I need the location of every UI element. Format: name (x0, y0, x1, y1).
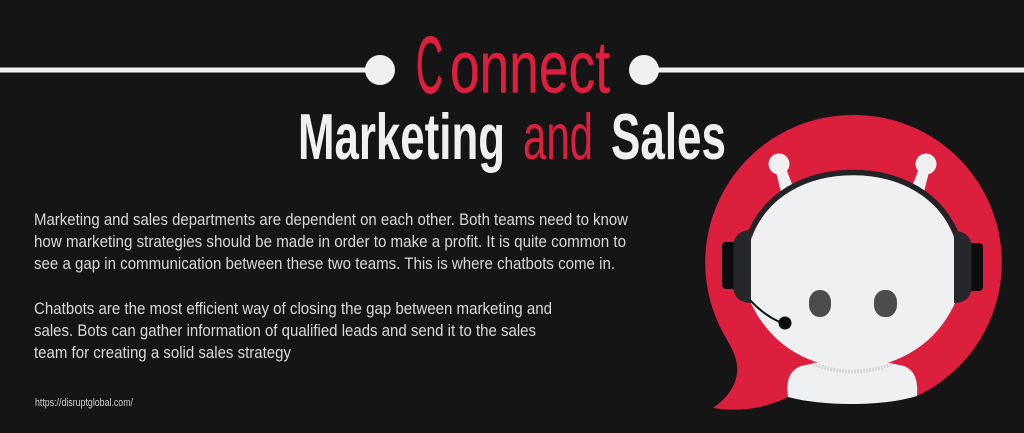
illustration: chatbot in speech bubble (705, 115, 1002, 410)
speech bubble (705, 115, 1002, 410)
paragraph: chatbots close the gap: team for creating a solid sales strategy (34, 343, 291, 362)
robot head (751, 175, 955, 368)
microphone (750, 300, 792, 330)
antennae (768, 154, 936, 192)
title rule: left line and dot (0, 55, 395, 85)
source URL: https://disruptglobal.com/ (35, 397, 134, 409)
heading: Marketing and Sales: and (523, 100, 593, 173)
paragraph: marketing and sales dependence: Marketing and sales departments are dependent on each other. Both teams need to know (34, 210, 629, 229)
left eye (809, 290, 831, 317)
heading: Connect: onnect (450, 28, 610, 108)
heading: Connect: C (416, 20, 443, 110)
paragraph: chatbots close the gap: Chatbots are the most efficient way of closing the gap between marketing and (34, 299, 552, 318)
right headphone (954, 231, 983, 303)
heading: Connect (416, 20, 610, 110)
robot body (787, 361, 917, 404)
paragraph: marketing and sales dependence: how marketing strategies should be made in order to make a profit. It is quite common to (34, 232, 626, 251)
paragraph: chatbots close the gap: sales. Bots can gather information of qualified leads and send it to the sales (34, 321, 536, 340)
collar (813, 364, 892, 372)
right eye (874, 290, 897, 317)
paragraph: marketing and sales dependence: see a gap in communication between these two teams. This is where chatbots come in. (34, 254, 615, 273)
paragraph: chatbots close the gap (34, 299, 552, 362)
heading: Marketing and Sales: Sales (611, 100, 726, 173)
left headphone (722, 230, 751, 303)
heading: Marketing and Sales: Marketing (298, 100, 505, 173)
headband (749, 172, 957, 236)
paragraph: marketing and sales dependence (34, 210, 629, 273)
title rule: right line and dot (629, 55, 1024, 85)
